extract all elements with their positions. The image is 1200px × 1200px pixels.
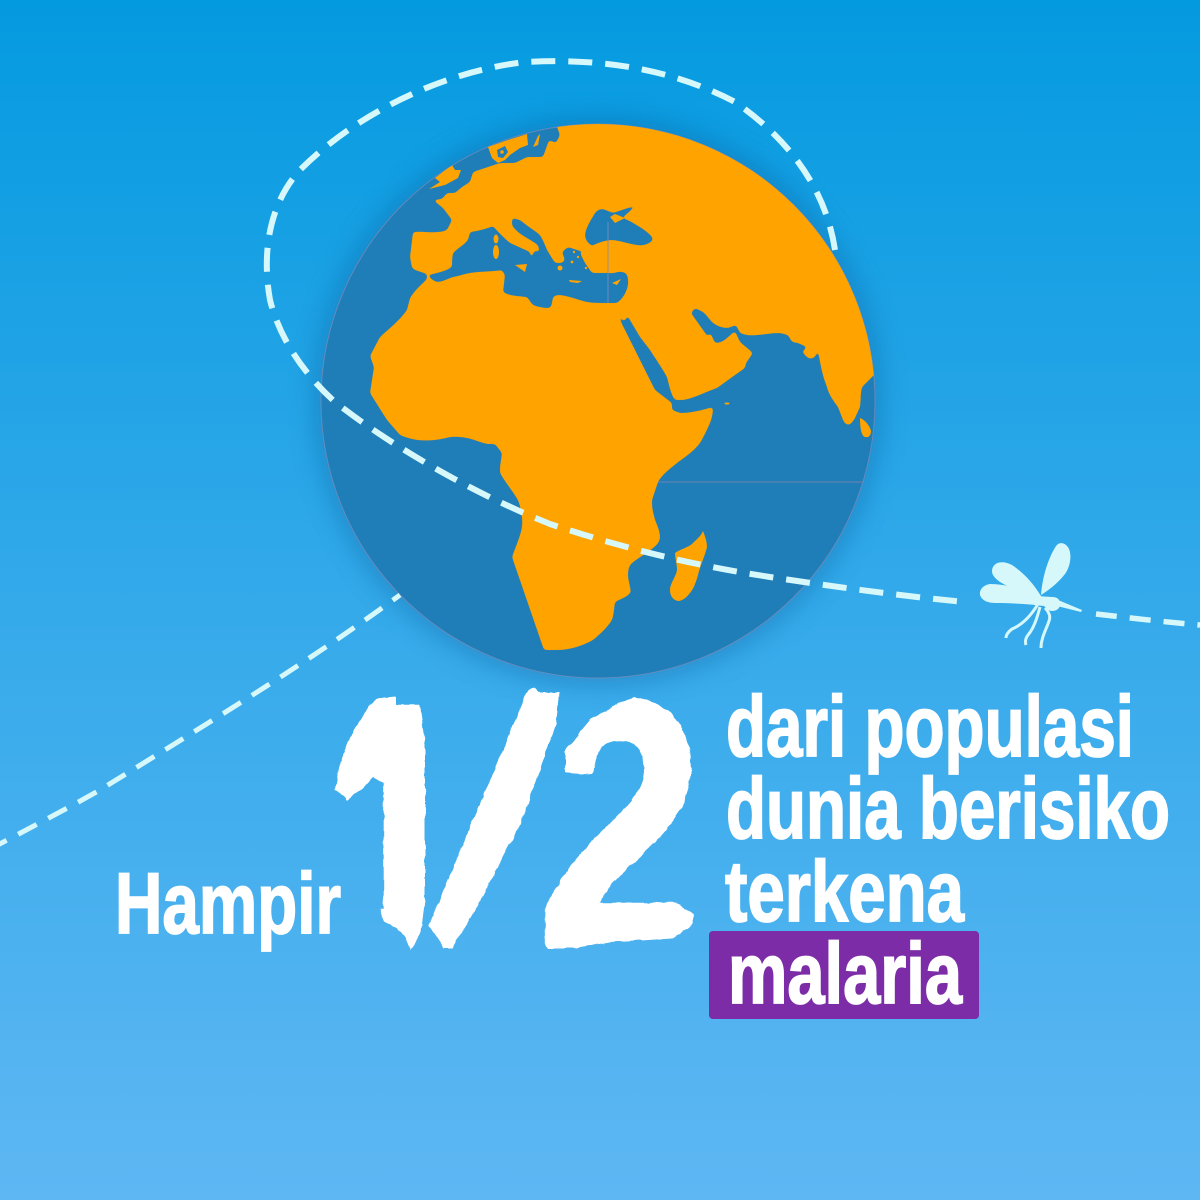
numeral 2: 2 <box>537 627 703 1020</box>
Madagascar <box>670 531 707 601</box>
icon: mosquito <box>980 543 1082 648</box>
continents: Europe, Asia and Africa <box>370 100 900 650</box>
meridian line <box>608 222 609 303</box>
Mediterranean Sea <box>428 218 628 308</box>
big fraction 1/2 <box>334 688 694 950</box>
slash: / <box>407 634 588 1014</box>
text: terkena: terkena <box>725 844 965 940</box>
dashed path right of mosquito <box>1096 614 1200 625</box>
highlight: malaria <box>709 926 979 1022</box>
dashed path lower left <box>0 595 400 849</box>
land masses <box>370 100 900 650</box>
Sri Lanka <box>860 418 871 437</box>
text: Hampir: Hampir <box>115 856 341 952</box>
brush flourish on numeral 1 <box>335 697 395 801</box>
Mediterranean islands <box>493 234 621 285</box>
Baltic swirl <box>497 146 508 158</box>
Scandinavia <box>488 134 528 163</box>
equator line <box>658 482 863 483</box>
Black Sea <box>585 205 653 246</box>
Socotra <box>724 402 730 404</box>
Great Britain <box>429 165 461 189</box>
dashed flight path around the globe <box>267 61 965 602</box>
globe shadow <box>316 119 880 683</box>
Finland strip <box>533 134 540 147</box>
Sea of Azov peninsula <box>610 214 625 223</box>
text: malaria: malaria <box>728 926 963 1022</box>
numeral 1: 1 <box>305 632 500 1023</box>
globe <box>321 100 900 678</box>
Danish island <box>500 150 504 154</box>
